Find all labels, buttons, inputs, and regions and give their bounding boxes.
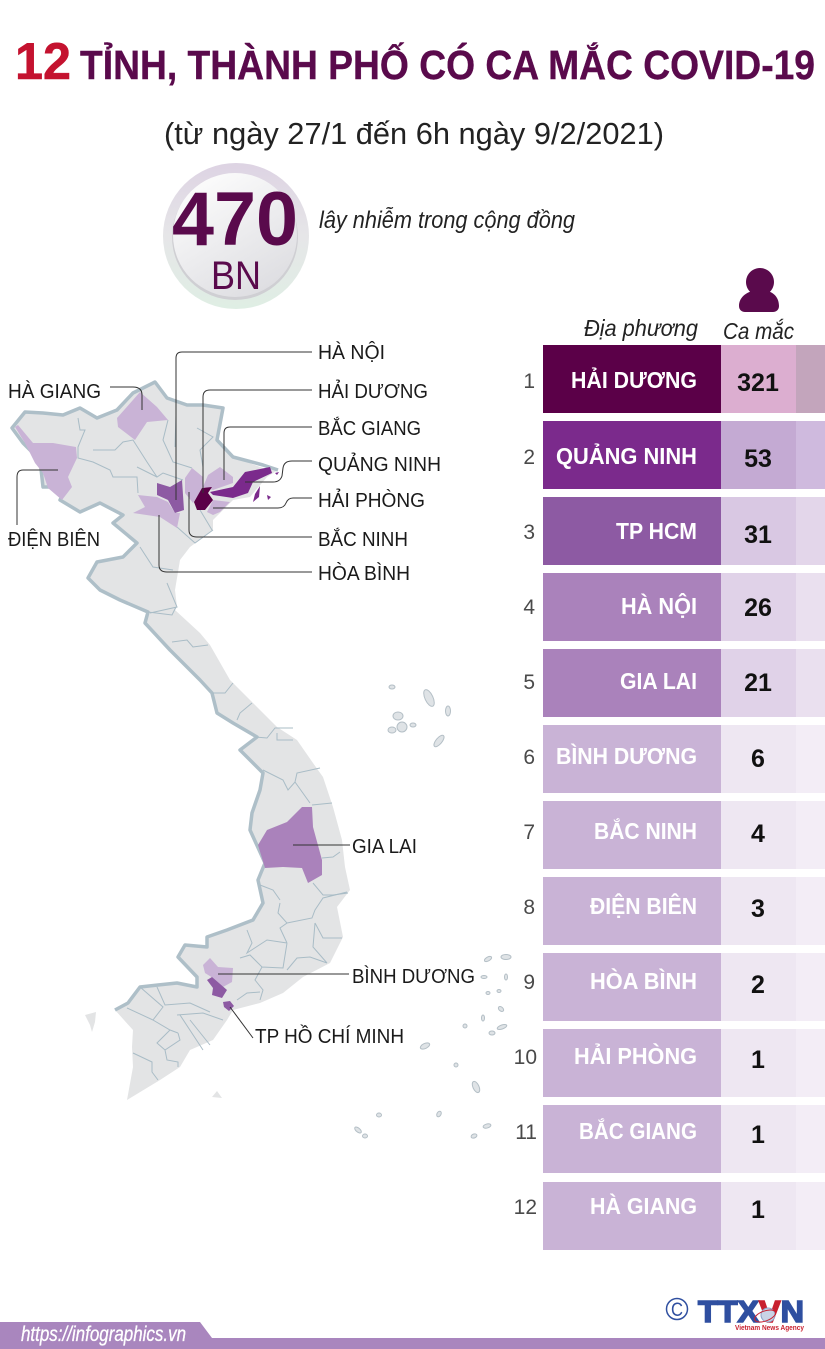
icon: person (739, 268, 779, 312)
row 8: 3 (751, 895, 765, 923)
badge caption: lây nhiễm trong cộng đồng (319, 206, 576, 234)
map labels: BẮC NINH (318, 527, 408, 551)
row 5 (523, 649, 825, 717)
islands: Phú Quốc and Côn Đảo (85, 1012, 222, 1098)
row 9: HÒA BÌNH (590, 967, 697, 994)
row 2: 53 (744, 445, 772, 473)
mainland outline (12, 382, 350, 1100)
map labels: ĐIỆN BIÊN (8, 528, 100, 551)
land border stroke (12, 382, 278, 1010)
row 11: BẮC GIANG (579, 1117, 697, 1144)
row 4: 4 (523, 596, 535, 619)
row 4 (523, 573, 825, 641)
province: TP Hồ Chí Minh (207, 977, 234, 1011)
row 7: 4 (751, 820, 765, 848)
total badge: 470 BN: 470 (172, 177, 298, 262)
row 6 (523, 725, 825, 793)
province: Bắc Giang (203, 467, 233, 490)
row 1: HẢI DƯƠNG (571, 365, 697, 393)
province: Bình Dương (203, 958, 233, 987)
table headers: Ca mắc (723, 318, 794, 344)
footer bar with URL tab: https://infographics.vn (21, 1323, 186, 1346)
map labels: TP HỒ CHÍ MINH (255, 1024, 404, 1048)
map labels: HẢI DƯƠNG (318, 380, 428, 403)
province: Quảng Ninh (210, 467, 279, 502)
row 12: HÀ GIANG (590, 1192, 697, 1219)
province: Hà Giang (117, 392, 168, 440)
map labels: BẮC GIANG (318, 416, 421, 440)
row 8: ĐIỆN BIÊN (590, 892, 697, 919)
map labels: BÌNH DƯƠNG (352, 965, 475, 988)
row 11: 1 (751, 1121, 765, 1149)
row 10: HẢI PHÒNG (574, 1041, 697, 1069)
row 12 (514, 1182, 825, 1250)
row 7: BẮC NINH (594, 817, 697, 844)
row 9: 2 (751, 971, 765, 999)
row 2: QUẢNG NINH (556, 441, 697, 469)
row 6: BÌNH DƯƠNG (556, 742, 697, 769)
logo: TTXVN: C (671, 1300, 683, 1321)
row 11: 11 (515, 1121, 537, 1144)
table headers: Địa phương (584, 315, 698, 341)
table headers (584, 315, 794, 344)
row 1: 321 (737, 369, 779, 397)
row 6: 6 (751, 745, 765, 773)
province: Bắc Ninh (185, 468, 203, 503)
map labels: HÀ GIANG (8, 380, 101, 403)
row 4: HÀ NỘI (621, 592, 697, 619)
province boundaries (78, 415, 348, 1080)
row 9: 9 (523, 971, 535, 994)
title: 12 (15, 33, 71, 91)
row 9 (523, 953, 825, 1021)
islands: Trường Sa (354, 954, 511, 1139)
row 2: 2 (523, 446, 535, 469)
footer bar with URL tab (0, 1322, 825, 1349)
row 8: 8 (523, 896, 535, 919)
ranking table (514, 345, 825, 1250)
row 10: 1 (751, 1046, 765, 1074)
row 4: 26 (744, 594, 772, 622)
row 1: 1 (523, 370, 535, 393)
province: Hà Nội (157, 480, 184, 513)
total badge: 470 BN: BN (211, 254, 261, 298)
subtitle: (từ ngày 27/1 đến 6h ngày 9/2/2021) (164, 116, 664, 151)
row 10 (514, 1029, 825, 1097)
row 5: GIA LAI (620, 668, 697, 694)
map labels: HẢI PHÒNG (318, 489, 425, 512)
province: Hải Phòng (207, 500, 230, 515)
province: Hải Dương (194, 487, 213, 510)
logo: TTXVN: Vietnam News Agency (735, 1325, 804, 1332)
row 8 (523, 877, 825, 945)
province: Hòa Bình (133, 495, 180, 528)
map labels: GIA LAI (352, 836, 417, 858)
province: Điện Biên (15, 425, 77, 500)
total badge: 470 BN (163, 163, 309, 309)
province: Gia Lai (258, 807, 322, 883)
row 12: 12 (514, 1196, 537, 1219)
row 11 (515, 1105, 825, 1173)
leader lines (17, 352, 350, 1038)
row 3: 3 (523, 521, 535, 544)
row 3: TP HCM (616, 518, 697, 544)
row 12: 1 (751, 1196, 765, 1224)
row 7: 7 (523, 821, 535, 844)
row 6: 6 (523, 746, 535, 769)
row 2 (523, 421, 825, 489)
row 3: 31 (744, 521, 772, 549)
islands: Hoàng Sa (388, 685, 450, 748)
logo: TTXVN: TTXVN (698, 1294, 804, 1329)
row 7 (523, 801, 825, 869)
map of Vietnam (12, 382, 511, 1139)
map labels: HÒA BÌNH (318, 562, 410, 585)
row 10: 10 (514, 1046, 537, 1069)
row 5: 5 (523, 671, 535, 694)
map labels (8, 341, 475, 1048)
map labels: HÀ NỘI (318, 341, 385, 364)
row 3 (523, 497, 825, 565)
map labels: QUẢNG NINH (318, 453, 441, 476)
row 1 (523, 345, 825, 413)
row 5: 21 (744, 669, 772, 697)
